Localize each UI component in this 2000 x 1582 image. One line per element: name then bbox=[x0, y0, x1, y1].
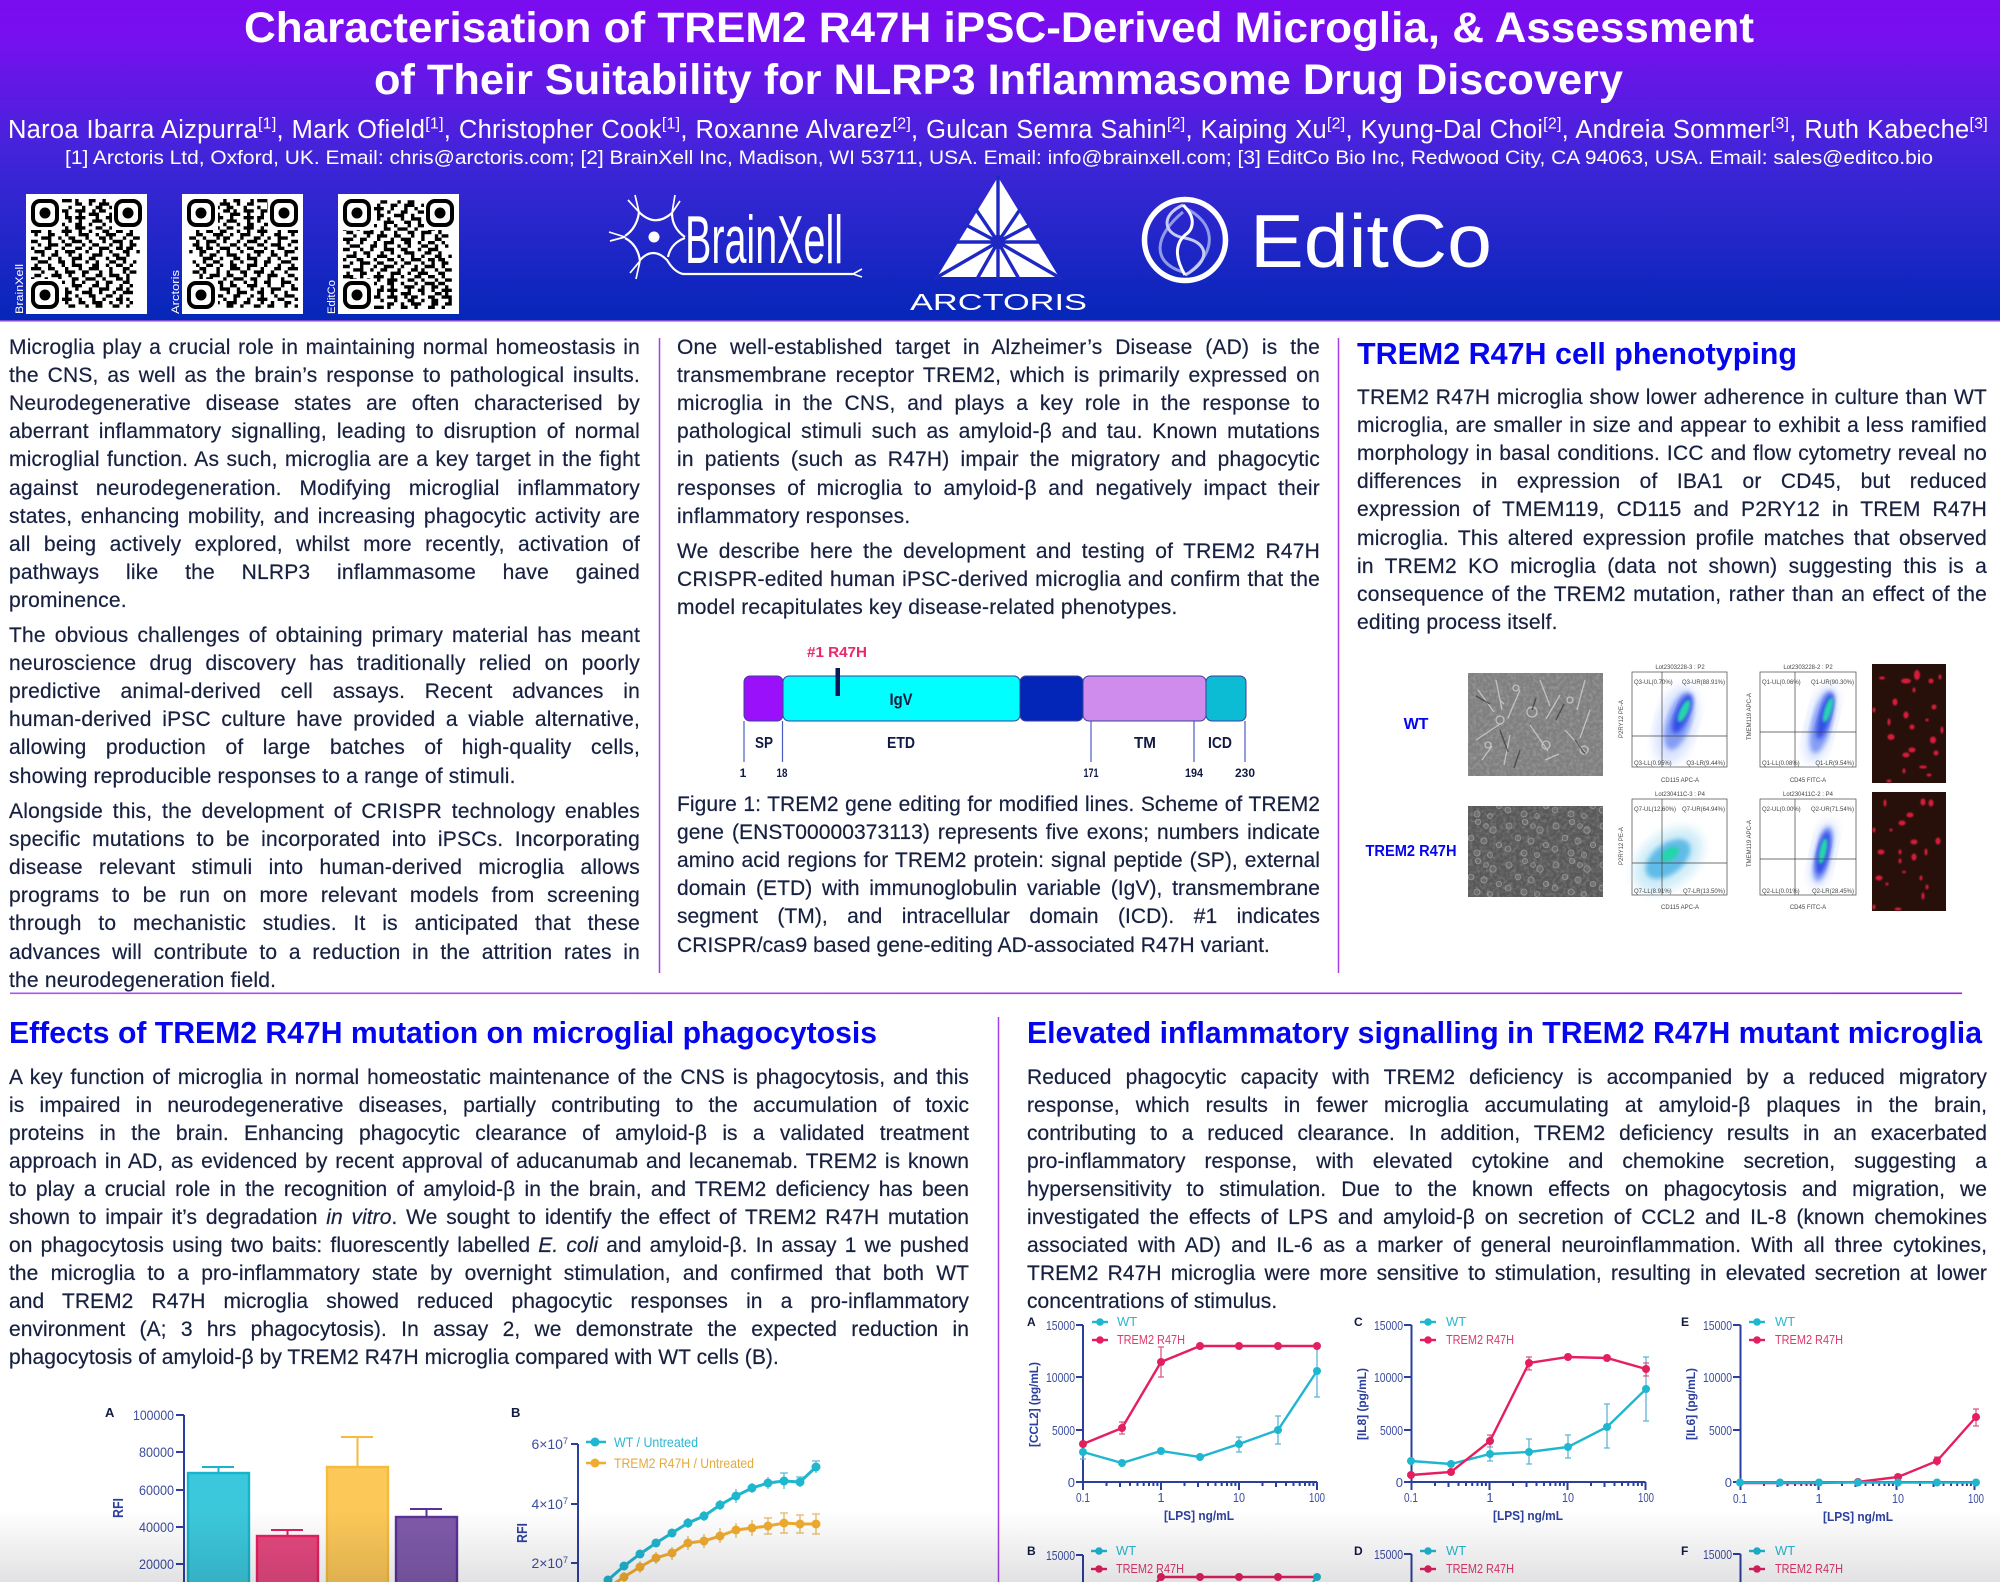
phenotyping row labels: WT bbox=[1404, 716, 1429, 733]
line chart B: phagocytosis over time: 6×10 bbox=[531, 1436, 563, 1452]
chart C: IL8 vs LPS: 100 bbox=[1638, 1490, 1654, 1505]
flow plot: CD45 TMEM119 TREM2 R47H: Q2-UR(71.54%) bbox=[1811, 807, 1854, 813]
text: phagocytosis description: approach in AD, as evidenced by recent approval of aducanumab and lecanemab. TREM2 is known bbox=[9, 1150, 969, 1173]
text: column 2 paragraph 1: pathological stimuli such as amyloid-β and tau. Known mutations bbox=[677, 420, 1320, 443]
chart E: IL6 vs LPS: E bbox=[1681, 1315, 1689, 1329]
chart E: IL6 vs LPS bbox=[1681, 1314, 1984, 1524]
chart C: IL8 vs LPS: [IL8] (pg/mL) bbox=[1355, 1368, 1369, 1440]
text: phenotyping description: microglia. This altered expression profile matches that observed bbox=[1357, 527, 1987, 550]
text: inflammatory signalling description: investigated the effects of LPS and amyloid-β on secretion of CCL2 and IL-8 (known chemokines bbox=[1027, 1206, 1987, 1229]
text: intro column 1 paragraph 1: Neurodegenerative disease states are often characterised by bbox=[9, 392, 640, 415]
title: Characterisation of TREM2 R47H iPSC-Derived Microglia, & Assessment bbox=[244, 4, 1754, 52]
text: phenotyping description: morphology in basal conditions. ICC and flow cytometry reveal no bbox=[1357, 442, 1987, 465]
chart C: IL8 vs LPS bbox=[1354, 1314, 1654, 1523]
text: phagocytosis description: on phagocytosis using two baits: fluorescently labelled E. coli and amyloid-β. In assay 1 we pushed bbox=[9, 1234, 969, 1257]
text: phagocytosis description: the microglia to a pro-inflammatory state by overnight stimulation, and confirmed that both WT bbox=[9, 1262, 969, 1285]
logo: EditCo: EditCo bbox=[1250, 199, 1492, 283]
text: intro column 1 paragraph 2: human-derived iPSC culture have provided a viable alternative, bbox=[9, 708, 640, 731]
flow plot: CD45 TMEM119 WT: Q1-UL(0.06%) bbox=[1762, 680, 1801, 686]
text: inflammatory signalling description: Reduced phagocytic capacity with TREM2 deficiency is accompanied by a reduced migratory bbox=[1027, 1066, 1987, 1089]
QR code: BrainXell: BrainXell bbox=[14, 264, 26, 314]
text: column 2 paragraph 1: in patients (such as R47H) impair the migratory and phagocytic bbox=[677, 448, 1320, 471]
line chart B: phagocytosis over time: 4×10 bbox=[531, 1496, 563, 1512]
chart C: IL8 vs LPS: 15000 bbox=[1374, 1318, 1403, 1333]
flow plot: CD115 P2RY12 TREM2 R47H: Q7-LR(13.50%) bbox=[1683, 889, 1725, 895]
bar chart A: phagocytosis RFI: A bbox=[105, 1405, 115, 1420]
flow plot: CD45 TMEM119 TREM2 R47H: CD45 FITC-A bbox=[1790, 905, 1826, 911]
chart B: CCL2 vs amyloid (partly cropped): TREM2 R47H bbox=[1116, 1561, 1184, 1576]
micrograph: TREM2 R47H bbox=[1468, 806, 1603, 897]
chart F: IL6 vs amyloid (partly cropped): TREM2 R47H bbox=[1775, 1561, 1843, 1576]
text: phagocytosis description: proteins in the brain. Enhancing phagocytic clearance of amyloid-β is a validated treatment bbox=[9, 1122, 969, 1145]
chart A: CCL2 vs LPS: 100 bbox=[1309, 1490, 1325, 1505]
text: figure 1 caption: Figure 1: TREM2 gene editing for modified lines. Scheme of TREM2 bbox=[677, 793, 1320, 816]
line chart B: phagocytosis over time bbox=[511, 1405, 820, 1582]
affiliations: [1] Arctoris Ltd, Oxford, UK. Email: chris@arctoris.com; [2] BrainXell Inc, Madison, WI 53711, USA. Email: info@brainxell.com; [3] EditCo Bio Inc, Redwood City, CA 94063, USA. Email: sales@editco.bio bbox=[65, 147, 1933, 169]
chart C: IL8 vs LPS: 1 bbox=[1486, 1490, 1494, 1505]
text: intro column 1 paragraph 1: prominence. bbox=[9, 589, 127, 612]
flow plot: CD115 P2RY12 WT: Lot2303228-3 : P2 bbox=[1655, 665, 1705, 671]
chart A: CCL2 vs LPS: 10000 bbox=[1046, 1370, 1075, 1385]
heading: cell phenotyping: TREM2 R47H cell phenotyping bbox=[1357, 337, 1797, 371]
text: phenotyping description: differences in expression of IBA1 or CD45, but reduced bbox=[1357, 470, 1987, 493]
text: intro column 1 paragraph 1: pathways like the NLRP3 inflammasome have gained bbox=[9, 561, 640, 584]
bar chart A: phagocytosis RFI: 60000 bbox=[139, 1482, 174, 1498]
text: intro column 1 paragraph 2: neuroscience drug discovery has traditionally relied on poorly bbox=[9, 652, 640, 675]
column dividers bbox=[660, 338, 1338, 1582]
flow plot: CD115 P2RY12 TREM2 R47H: Lot230411C-3 : P4 bbox=[1655, 792, 1706, 798]
text: inflammatory signalling description: pro-inflammatory response, with elevated cytokine and chemokine secretion, suggesting a bbox=[1027, 1150, 1987, 1173]
text: intro column 1 paragraph 3: disease relevant stimuli into human-derived microglia allows bbox=[9, 856, 640, 879]
chart E: IL6 vs LPS: 10000 bbox=[1703, 1370, 1732, 1385]
text: column 2 paragraph 1: inflammatory responses. bbox=[677, 505, 910, 528]
text: figure 1 caption: amino acid regions for TREM2 protein: signal peptide (SP), external bbox=[677, 849, 1320, 872]
text: intro column 1 paragraph 3 bbox=[8, 800, 640, 992]
chart F: IL6 vs amyloid (partly cropped): F bbox=[1681, 1544, 1688, 1558]
flow plot: CD115 P2RY12 WT bbox=[1619, 665, 1727, 784]
chart D: IL8 vs amyloid (partly cropped): D bbox=[1354, 1544, 1363, 1558]
text: intro column 1 paragraph 3: specific mutations to be incorporated into iPSCs. Incorporating bbox=[9, 828, 640, 851]
chart E: IL6 vs LPS: 10 bbox=[1892, 1491, 1904, 1506]
chart E: IL6 vs LPS: [IL6] (pg/mL) bbox=[1684, 1368, 1698, 1440]
text: phenotyping description: editing process itself. bbox=[1357, 611, 1558, 634]
chart A: CCL2 vs LPS: 5000 bbox=[1052, 1423, 1075, 1438]
chart C: IL8 vs LPS: 5000 bbox=[1380, 1423, 1403, 1438]
chart D: IL8 vs amyloid (partly cropped) bbox=[1354, 1543, 1514, 1582]
bar chart A: phagocytosis RFI bbox=[105, 1405, 457, 1582]
bar chart A: phagocytosis RFI: 20000 bbox=[139, 1556, 174, 1572]
bar chart A: phagocytosis RFI: 100000 bbox=[133, 1407, 174, 1423]
text: phagocytosis description: phagocytosis of amyloid-β by TREM2 R47H microglia compared with WT cells (B). bbox=[9, 1346, 779, 1369]
text: intro column 1 paragraph 1: microglial function. As such, microglia are a key target in the fight bbox=[9, 448, 640, 471]
chart E: IL6 vs LPS: 0 bbox=[1725, 1475, 1732, 1490]
flow plot: CD45 TMEM119 WT: Q1-LL(0.08%) bbox=[1762, 761, 1800, 767]
text: intro column 1 paragraph 3: Alongside this, the development of CRISPR technology enables bbox=[9, 800, 640, 823]
flow plot: CD45 TMEM119 WT: Q1-LR(9.54%) bbox=[1815, 761, 1854, 767]
legend: TREM2 R47H / Untreated bbox=[614, 1455, 754, 1471]
text: intro column 1 paragraph 2: The obvious challenges of obtaining primary material has meant bbox=[9, 624, 640, 647]
chart D: IL8 vs amyloid (partly cropped): TREM2 R47H bbox=[1446, 1561, 1514, 1576]
text: intro column 1 paragraph 2: allowing production of large batches of high-quality cells, bbox=[9, 736, 640, 759]
chart C: IL8 vs LPS: 0.1 bbox=[1404, 1490, 1418, 1505]
text: intro column 1 paragraph 1 bbox=[9, 336, 640, 612]
logo: BrainXell bbox=[609, 195, 862, 279]
phenotyping row labels: TREM2 R47H bbox=[1366, 843, 1456, 860]
QR code: Arctoris bbox=[170, 194, 303, 314]
figure 1: TREM2 gene scheme: ETD bbox=[887, 735, 915, 752]
text: column 2 paragraph 2: model recapitulates key disease-related phenotypes. bbox=[677, 596, 1178, 619]
title bbox=[244, 4, 1754, 104]
line chart B: phagocytosis over time: RFI bbox=[514, 1523, 531, 1543]
text: intro column 1 paragraph 1: all being actively explored, whilst more recently, activation of bbox=[9, 533, 640, 556]
logo: EditCo bbox=[1144, 199, 1492, 283]
text: phenotyping description: expression of TMEM119, CD115 and P2RY12 in TREM R47H bbox=[1357, 498, 1987, 521]
flow plot: CD115 P2RY12 WT: CD115 APC-A bbox=[1661, 778, 1699, 784]
flow plot: CD45 TMEM119 TREM2 R47H: Lot230411C-2 : P4 bbox=[1783, 792, 1834, 798]
text: phagocytosis description bbox=[8, 1066, 969, 1369]
flow plot: CD115 P2RY12 WT: Q3-UR(88.91%) bbox=[1682, 680, 1725, 686]
flow plot: CD115 P2RY12 TREM2 R47H bbox=[1619, 792, 1727, 911]
figure 1: TREM2 gene scheme: ICD bbox=[1208, 735, 1232, 752]
text: column 2 paragraph 1 bbox=[677, 336, 1320, 528]
chart C: IL8 vs LPS: 10000 bbox=[1374, 1370, 1403, 1385]
chart A: CCL2 vs LPS bbox=[1027, 1314, 1325, 1523]
bar chart A: phagocytosis RFI: RFI bbox=[110, 1498, 127, 1518]
text: inflammatory signalling description: concentrations of stimulus. bbox=[1027, 1290, 1277, 1313]
text: column 2 paragraph 2 bbox=[677, 540, 1320, 619]
line chart B: phagocytosis over time: 2×10 bbox=[531, 1555, 563, 1571]
figure 1: TREM2 gene scheme: 171 bbox=[1084, 766, 1099, 780]
legend bbox=[586, 1434, 754, 1471]
logo: Arctoris bbox=[910, 176, 1087, 315]
chart D: IL8 vs amyloid (partly cropped): WT bbox=[1446, 1543, 1466, 1558]
bar chart A: phagocytosis RFI: 40000 bbox=[139, 1519, 174, 1535]
flow plot: CD45 TMEM119 WT: TMEM119 APC-A bbox=[1747, 693, 1753, 740]
chart A: CCL2 vs LPS: WT bbox=[1117, 1314, 1137, 1329]
text: figure 1 caption: CRISPR/cas9 based gene-editing AD-associated R47H variant. bbox=[677, 934, 1270, 957]
chart B: CCL2 vs amyloid (partly cropped): 15000 bbox=[1046, 1548, 1075, 1563]
text: intro column 1 paragraph 2: showing reproducible responses to a range of stimuli. bbox=[9, 765, 516, 788]
text: phagocytosis description: shown to impair it’s degradation in vitro. We sought to identify the effect of TREM2 R47H mutation bbox=[9, 1206, 969, 1229]
flow plot: CD45 TMEM119 TREM2 R47H: Q2-LL(0.01%) bbox=[1762, 889, 1800, 895]
text: intro column 1 paragraph 2: predictive animal-derived cell assays. Recent advances in bbox=[9, 680, 640, 703]
flow plot: CD45 TMEM119 WT bbox=[1747, 665, 1856, 784]
text: inflammatory signalling description: TREM2 R47H microglia were more sensitive to stimulation, resulting in elevated secretion at lower bbox=[1027, 1262, 1987, 1285]
text: intro column 1 paragraph 1: the CNS, as well as the brain’s response to pathological insults. bbox=[9, 364, 640, 387]
text: phenotyping description bbox=[1357, 386, 1987, 634]
text: inflammatory signalling description: response, which results in fewer microglia accumulating at amyloid-β plaques in the brain, bbox=[1027, 1094, 1987, 1117]
text: column 2 paragraph 1: One well-established target in Alzheimer’s Disease (AD) is the bbox=[677, 336, 1320, 359]
text: phagocytosis description: and TREM2 R47H microglia showed reduced phagocytic responses in a pro-inflammatory bbox=[9, 1290, 969, 1313]
text: intro column 1 paragraph 1: Microglia play a crucial role in maintaining normal homeostasis in bbox=[9, 336, 640, 359]
flow plot: CD45 TMEM119 TREM2 R47H: Q2-UL(0.00%) bbox=[1762, 807, 1801, 813]
chart F: IL6 vs amyloid (partly cropped): 15000 bbox=[1703, 1547, 1732, 1562]
chart E: IL6 vs LPS: 15000 bbox=[1703, 1318, 1732, 1333]
flow plot: CD115 P2RY12 WT: Q3-LR(9.44%) bbox=[1686, 761, 1725, 767]
flow plot: CD115 P2RY12 TREM2 R47H: Q7-UL(12.60%) bbox=[1634, 807, 1676, 813]
text: column 2 paragraph 2: We describe here the development and testing of TREM2 R47H bbox=[677, 540, 1320, 563]
figure 1: TREM2 gene scheme: IgV bbox=[890, 691, 912, 709]
heading: phagocytosis: Effects of TREM2 R47H mutation on microglial phagocytosis bbox=[9, 1016, 877, 1050]
text: figure 1 caption: domain (ETD) with immunoglobulin variable (IgV), transmembrane bbox=[677, 877, 1320, 900]
chart A: CCL2 vs LPS: A bbox=[1027, 1315, 1036, 1329]
text: phenotyping description: TREM2 R47H microglia show lower adherence in culture than WT bbox=[1357, 386, 1987, 409]
chart E: IL6 vs LPS: 5000 bbox=[1709, 1423, 1732, 1438]
text: intro column 1 paragraph 1: states, enhancing mobility, and increasing phagocytic activity are bbox=[9, 505, 640, 528]
authors: Naroa Ibarra Aizpurra[1], Mark Ofield[1], Christopher Cook[1], Roxanne Alvarez[2], Gulcan Semra Sahin[2], Kaiping Xu[2], Kyung-Dal Choi[2], Andreia Sommer[3], Ruth Kabeche[3] bbox=[8, 116, 1988, 144]
flow plot: CD115 P2RY12 TREM2 R47H: CD115 APC-A bbox=[1661, 905, 1699, 911]
text: figure 1 caption bbox=[677, 793, 1320, 957]
chart A: CCL2 vs LPS: 0.1 bbox=[1076, 1490, 1090, 1505]
figure 1: TREM2 gene scheme: 18 bbox=[776, 766, 788, 780]
chart A: CCL2 vs LPS: 1 bbox=[1157, 1490, 1165, 1505]
flow plot: CD45 TMEM119 TREM2 R47H: TMEM119 APC-A bbox=[1747, 820, 1753, 867]
text: intro column 1 paragraph 3: advances will contribute to a reduction in the attrition rates in bbox=[9, 941, 640, 964]
text: intro column 1 paragraph 1: aberrant inflammatory signalling, leading to disruption of normal bbox=[9, 420, 640, 443]
flow plot: CD115 P2RY12 WT: P2RY12 PE-A bbox=[1619, 700, 1625, 738]
flow plot: CD115 P2RY12 WT: Q3-LL(0.95%) bbox=[1634, 761, 1672, 767]
figure 1: TREM2 gene scheme: 1 bbox=[740, 766, 747, 780]
text: column 2 paragraph 1: microglia in the CNS, and plays a key role in the response to bbox=[677, 392, 1320, 415]
chart B: CCL2 vs amyloid (partly cropped) bbox=[1027, 1543, 1321, 1582]
figure 1: TREM2 gene scheme bbox=[740, 645, 1255, 780]
text: intro column 1 paragraph 3: the neurodegeneration field. bbox=[9, 969, 276, 992]
header banner bbox=[0, 0, 2000, 322]
QR code: EditCo: EditCo bbox=[326, 280, 338, 314]
chart B: CCL2 vs amyloid (partly cropped): B bbox=[1027, 1544, 1036, 1558]
logo: Arctoris: ARCTORIS bbox=[910, 289, 1087, 315]
flow plot: CD115 P2RY12 TREM2 R47H: Q7-UR(64.94%) bbox=[1682, 807, 1725, 813]
text: phenotyping description: consequence of the TREM2 mutation, rather than an effect of the bbox=[1357, 583, 1987, 606]
text: phagocytosis description: environment (A; 3 hrs phagocytosis). In assay 2, we demonstrate the expected reduction in bbox=[9, 1318, 969, 1341]
QR code: EditCo bbox=[326, 194, 459, 314]
chart C: IL8 vs LPS: C bbox=[1354, 1315, 1363, 1329]
flow plot: CD115 P2RY12 TREM2 R47H: P2RY12 PE-A bbox=[1619, 827, 1625, 865]
chart C: IL8 vs LPS: 0 bbox=[1396, 1475, 1403, 1490]
line chart B: phagocytosis over time: B bbox=[511, 1405, 520, 1420]
legend: WT / Untreated bbox=[614, 1434, 698, 1450]
text: column 2 paragraph 2: CRISPR-edited human iPSC-derived microglia and confirm that the bbox=[677, 568, 1320, 591]
line chart B: phagocytosis over time: 7 bbox=[563, 1555, 568, 1565]
text: column 2 paragraph 1: responses of microglia to amyloid-β and negatively impact their bbox=[677, 477, 1320, 500]
text: inflammatory signalling description: hypersensitivity to stimulation. Due to the known effects on phagocytosis and migration, we bbox=[1027, 1178, 1987, 1201]
figure 1: TREM2 gene scheme: SP bbox=[755, 735, 773, 752]
QR code: Arctoris: Arctoris bbox=[170, 269, 182, 314]
fluorescence image: TREM2 R47H bbox=[1872, 792, 1946, 911]
chart B: CCL2 vs amyloid (partly cropped): WT bbox=[1116, 1543, 1136, 1558]
flow plot: CD45 TMEM119 TREM2 R47H bbox=[1747, 792, 1856, 911]
text: phenotyping description: microglia, are smaller in size and appear to exhibit a less ramified bbox=[1357, 414, 1987, 437]
chart A: CCL2 vs LPS: 15000 bbox=[1046, 1318, 1075, 1333]
text: figure 1 caption: gene (ENST00000373113) represents five exons; numbers indicate bbox=[677, 821, 1320, 844]
text: column 2 paragraph 1: transmembrane receptor TREM2, which is primarily expressed on bbox=[677, 364, 1320, 387]
text: intro column 1 paragraph 2 bbox=[9, 624, 640, 788]
flow plot: CD45 TMEM119 WT: CD45 FITC-A bbox=[1790, 778, 1826, 784]
text: intro column 1 paragraph 3: programs to be run on more relevant models from screening bbox=[9, 884, 640, 907]
fluorescence image: WT bbox=[1872, 664, 1946, 783]
figure 1: TREM2 gene scheme: TM bbox=[1134, 735, 1156, 752]
chart F: IL6 vs amyloid (partly cropped) bbox=[1681, 1543, 1843, 1582]
chart E: IL6 vs LPS: 100 bbox=[1968, 1491, 1984, 1506]
line chart B: phagocytosis over time: 7 bbox=[563, 1496, 568, 1506]
text: phagocytosis description: is impaired in neurodegenerative diseases, partially contributing to the accumulation of toxic bbox=[9, 1094, 969, 1117]
text: inflammatory signalling description: contributing to a reduced clearance. In addition, TREM2 deficiency results in an exacerbated bbox=[1027, 1122, 1987, 1145]
bar chart A: phagocytosis RFI: 80000 bbox=[139, 1444, 174, 1460]
line chart B: phagocytosis over time: 7 bbox=[563, 1436, 568, 1446]
flow plot: CD45 TMEM119 WT: Lot2303228-2 : P2 bbox=[1783, 665, 1833, 671]
flow plot: CD45 TMEM119 TREM2 R47H: Q2-LR(28.45%) bbox=[1812, 889, 1854, 895]
flow plot: CD45 TMEM119 WT: Q1-UR(90.30%) bbox=[1811, 680, 1854, 686]
chart E: IL6 vs LPS: TREM2 R47H bbox=[1775, 1332, 1843, 1347]
heading: inflammatory signalling: Elevated inflammatory signalling in TREM2 R47H mutant microglia bbox=[1027, 1016, 1983, 1050]
text: phagocytosis description: to play a crucial role in the recognition of amyloid-β in the brain, and TREM2 deficiency has been bbox=[9, 1178, 969, 1201]
chart F: IL6 vs amyloid (partly cropped): WT bbox=[1775, 1543, 1795, 1558]
text: inflammatory signalling description bbox=[1027, 1066, 1988, 1313]
chart A: CCL2 vs LPS: [CCL2] (pg/mL) bbox=[1027, 1362, 1041, 1447]
text: intro column 1 paragraph 1: against neurodegeneration. Modifying microglial inflammatory bbox=[9, 477, 640, 500]
text: phenotyping description: in TREM2 KO microglia (data not shown) suggesting this is a bbox=[1357, 555, 1987, 578]
flow plot: CD115 P2RY12 WT: Q3-UL(0.70%) bbox=[1634, 680, 1673, 686]
text: inflammatory signalling description: associated with AD) and IL-6 as a marker of general neuroinflammation. With all three cytokines, bbox=[1027, 1234, 1987, 1257]
phenotyping row labels bbox=[1366, 716, 1456, 860]
title: of Their Suitability for NLRP3 Inflammasome Drug Discovery bbox=[374, 56, 1623, 104]
chart A: CCL2 vs LPS: [LPS] ng/mL bbox=[1164, 1508, 1234, 1523]
QR code: BrainXell bbox=[14, 194, 147, 314]
chart C: IL8 vs LPS: WT bbox=[1446, 1314, 1466, 1329]
chart E: IL6 vs LPS: 1 bbox=[1815, 1491, 1823, 1506]
text: figure 1 caption: segment (TM), and intracellular domain (ICD). #1 indicates bbox=[677, 905, 1320, 928]
chart A: CCL2 vs LPS: TREM2 R47H bbox=[1117, 1332, 1185, 1347]
figure 1: TREM2 gene scheme: #1 R47H bbox=[807, 645, 867, 661]
text: intro column 1 paragraph 3: through to mechanistic studies. It is anticipated that these bbox=[9, 912, 640, 935]
chart D: IL8 vs amyloid (partly cropped): 15000 bbox=[1374, 1547, 1403, 1562]
chart C: IL8 vs LPS: TREM2 R47H bbox=[1446, 1332, 1514, 1347]
logo: BrainXell: BrainXell bbox=[685, 202, 843, 278]
chart A: CCL2 vs LPS: 0 bbox=[1068, 1475, 1075, 1490]
chart C: IL8 vs LPS: 10 bbox=[1562, 1490, 1574, 1505]
flow plot: CD115 P2RY12 TREM2 R47H: Q7-LL(8.91%) bbox=[1634, 889, 1672, 895]
chart E: IL6 vs LPS: [LPS] ng/mL bbox=[1823, 1509, 1893, 1524]
chart C: IL8 vs LPS: [LPS] ng/mL bbox=[1493, 1508, 1563, 1523]
chart E: IL6 vs LPS: 0.1 bbox=[1733, 1491, 1747, 1506]
chart A: CCL2 vs LPS: 10 bbox=[1233, 1490, 1245, 1505]
chart E: IL6 vs LPS: WT bbox=[1775, 1314, 1795, 1329]
figure 1: TREM2 gene scheme: 230 bbox=[1235, 766, 1255, 780]
micrograph: WT bbox=[1468, 673, 1603, 776]
figure 1: TREM2 gene scheme: 194 bbox=[1185, 766, 1203, 780]
text: phagocytosis description: A key function of microglia in normal homeostatic maintenance of the CNS is phagocytosis, and this bbox=[9, 1066, 969, 1089]
